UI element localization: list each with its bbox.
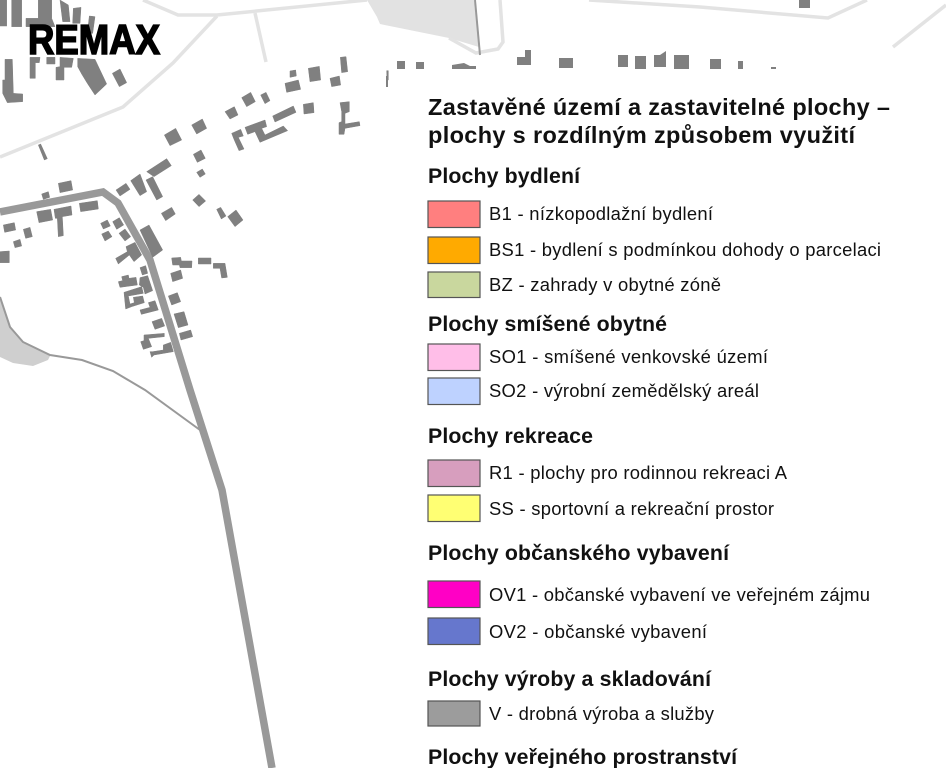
legend title: plochy s rozdílným způsobem využití (428, 122, 856, 148)
map: light roads (0, 0, 946, 157)
heading: Plochy občanského vybavení (428, 541, 730, 565)
heading: Plochy výroby a skladování (428, 667, 712, 691)
map: buildings north (0, 0, 388, 177)
legend item: SO2 (428, 378, 759, 404)
legend title (428, 94, 890, 148)
legend group: Plochy bydlení (428, 164, 881, 298)
map: main road (0, 192, 272, 768)
map: thin grey lines (0, 0, 480, 430)
legend item: OV2 (428, 618, 708, 644)
legend group: Plochy rekreace (428, 424, 788, 522)
legend item: OV2: OV2 - občanské vybavení (489, 621, 708, 642)
map: buildings north-east (386, 0, 810, 87)
legend item: BS1 (428, 237, 881, 264)
legend item: BZ (428, 272, 721, 298)
map: buildings along road (0, 174, 243, 357)
legend item: V: V - drobná výroba a služby (489, 703, 715, 724)
map: grey water areas (0, 0, 479, 366)
legend item: R1 (428, 460, 788, 486)
legend item: BS1: BS1 - bydlení s podmínkou dohody o parcelaci (489, 239, 881, 260)
legend item: R1: R1 - plochy pro rodinnou rekreaci A (489, 462, 788, 483)
legend item: SO1 (428, 344, 769, 370)
legend item: SO2: SO2 - výrobní zemědělský areál (489, 380, 759, 401)
logo: RE/MAX: REMAX (28, 16, 160, 63)
legend item: SS: SS - sportovní a rekreační prostor (489, 498, 774, 519)
legend item: SO1: SO1 - smíšené venkovské území (489, 346, 769, 367)
heading: Plochy rekreace (428, 424, 593, 448)
legend item: BZ: BZ - zahrady v obytné zóně (489, 274, 721, 295)
legend group: Plochy smíšené obytné (428, 312, 769, 404)
legend item: B1 (428, 201, 714, 228)
legend item: SS (428, 495, 774, 522)
legend item: V (428, 701, 715, 726)
legend title: Zastavěné území a zastavitelné plochy – (428, 94, 890, 120)
legend item: B1: B1 - nízkopodlažní bydlení (489, 203, 714, 224)
legend item: OV1: OV1 - občanské vybavení ve veřejném zájmu (489, 584, 870, 605)
heading: Plochy smíšené obytné (428, 312, 667, 336)
heading: Plochy bydlení (428, 164, 581, 188)
legend group: Plochy občanského vybavení (428, 541, 870, 644)
legend group: Plochy výroby a skladování (428, 667, 715, 726)
legend item: OV1 (428, 581, 870, 608)
